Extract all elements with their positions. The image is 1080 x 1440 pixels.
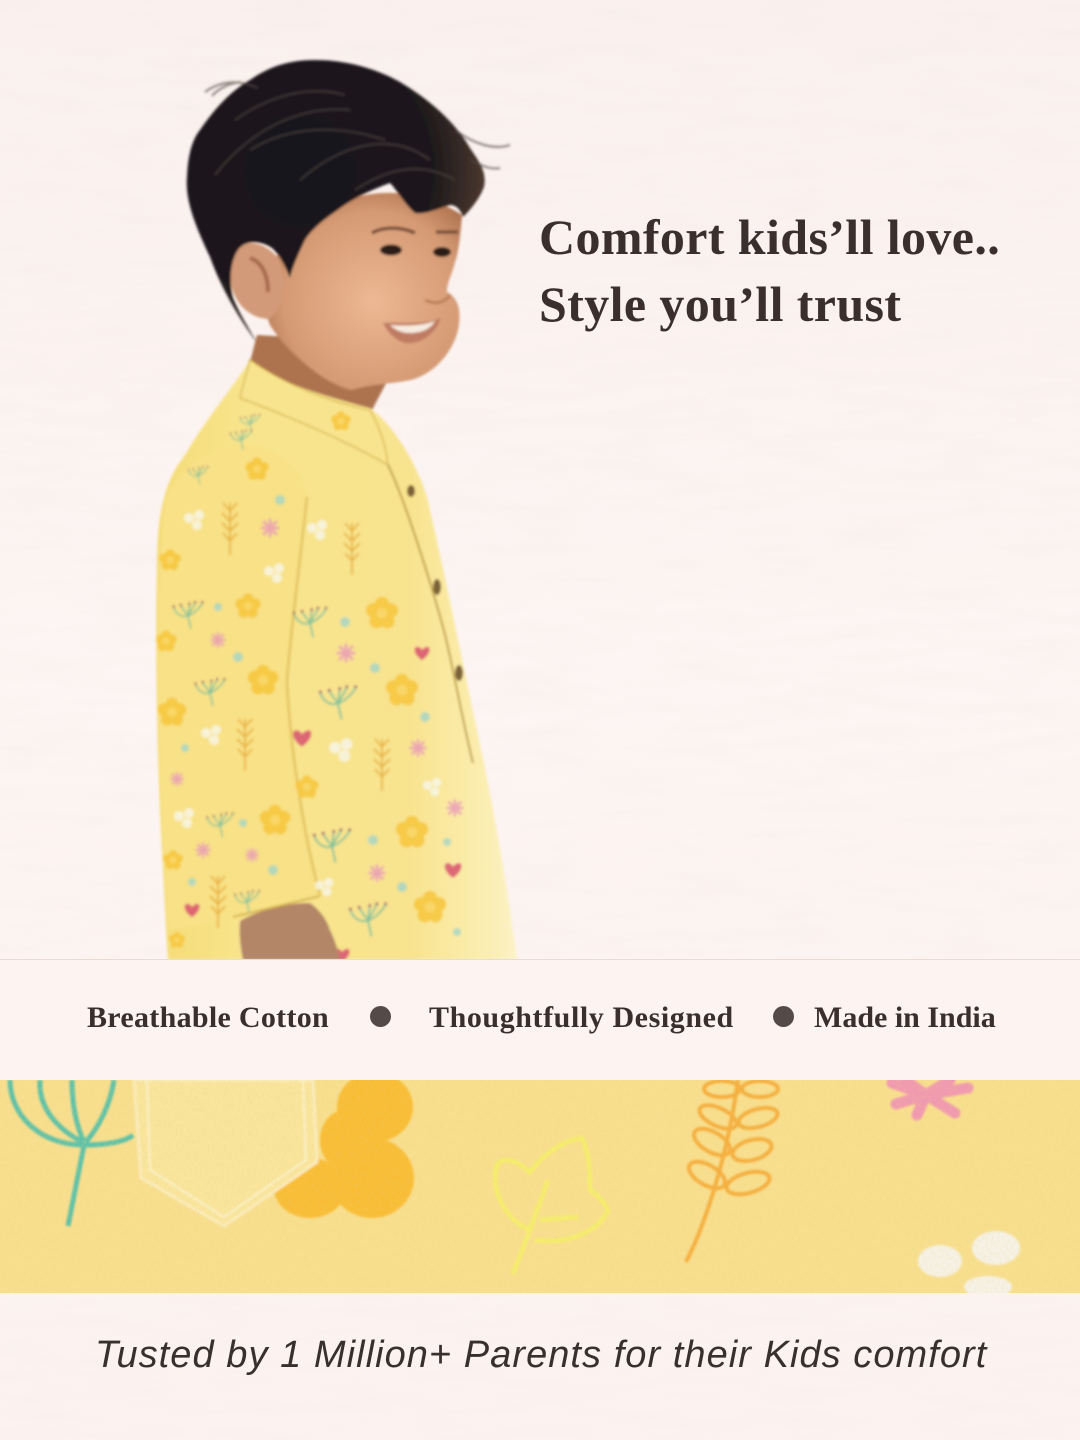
bullet [370, 1006, 391, 1027]
collar [240, 360, 388, 465]
bullet [773, 1006, 794, 1027]
yellow kurta [155, 360, 517, 962]
placket [388, 465, 473, 763]
white dots [918, 1231, 1020, 1298]
heading: Comfort kids’ll love.. [539, 209, 1000, 265]
inner ear [250, 258, 268, 292]
yellow leaf [495, 1138, 608, 1274]
floral print [155, 411, 462, 962]
face [265, 193, 462, 390]
eyes [372, 228, 458, 257]
orange flower [274, 1072, 414, 1218]
pocket stitch [147, 1080, 306, 1217]
orange wheat sprig [685, 1080, 780, 1262]
heading [539, 209, 1000, 332]
feature: breathable cotton: Breathable Cotton [87, 1001, 329, 1034]
orange petal stroke [270, 1080, 284, 1115]
tagline: Tusted by 1 Million+ Parents for their Kids comfort [95, 1334, 987, 1376]
feature: thoughtfully designed: Thoughtfully Designed [429, 1001, 734, 1034]
fabric close-up band [0, 1006, 1080, 1293]
heading: Style you’ll trust [539, 276, 901, 332]
features strip [0, 959, 1080, 1080]
pink flower [892, 1080, 968, 1115]
hand [240, 903, 340, 960]
smile [383, 318, 441, 343]
sleeve cuff [233, 896, 320, 917]
neck [250, 335, 392, 410]
sleeve seam [287, 497, 320, 895]
nose shading [425, 295, 450, 303]
hair [187, 60, 485, 343]
feature: made in india: Made in India [814, 1001, 996, 1034]
sleeve panel [158, 444, 320, 930]
pocket [134, 1080, 317, 1226]
hair strands [205, 82, 510, 190]
buttons [407, 485, 463, 681]
teal sprig [10, 1080, 133, 1226]
ear [230, 243, 284, 319]
illustration: smiling boy in yellow floral kurta [154, 58, 518, 959]
